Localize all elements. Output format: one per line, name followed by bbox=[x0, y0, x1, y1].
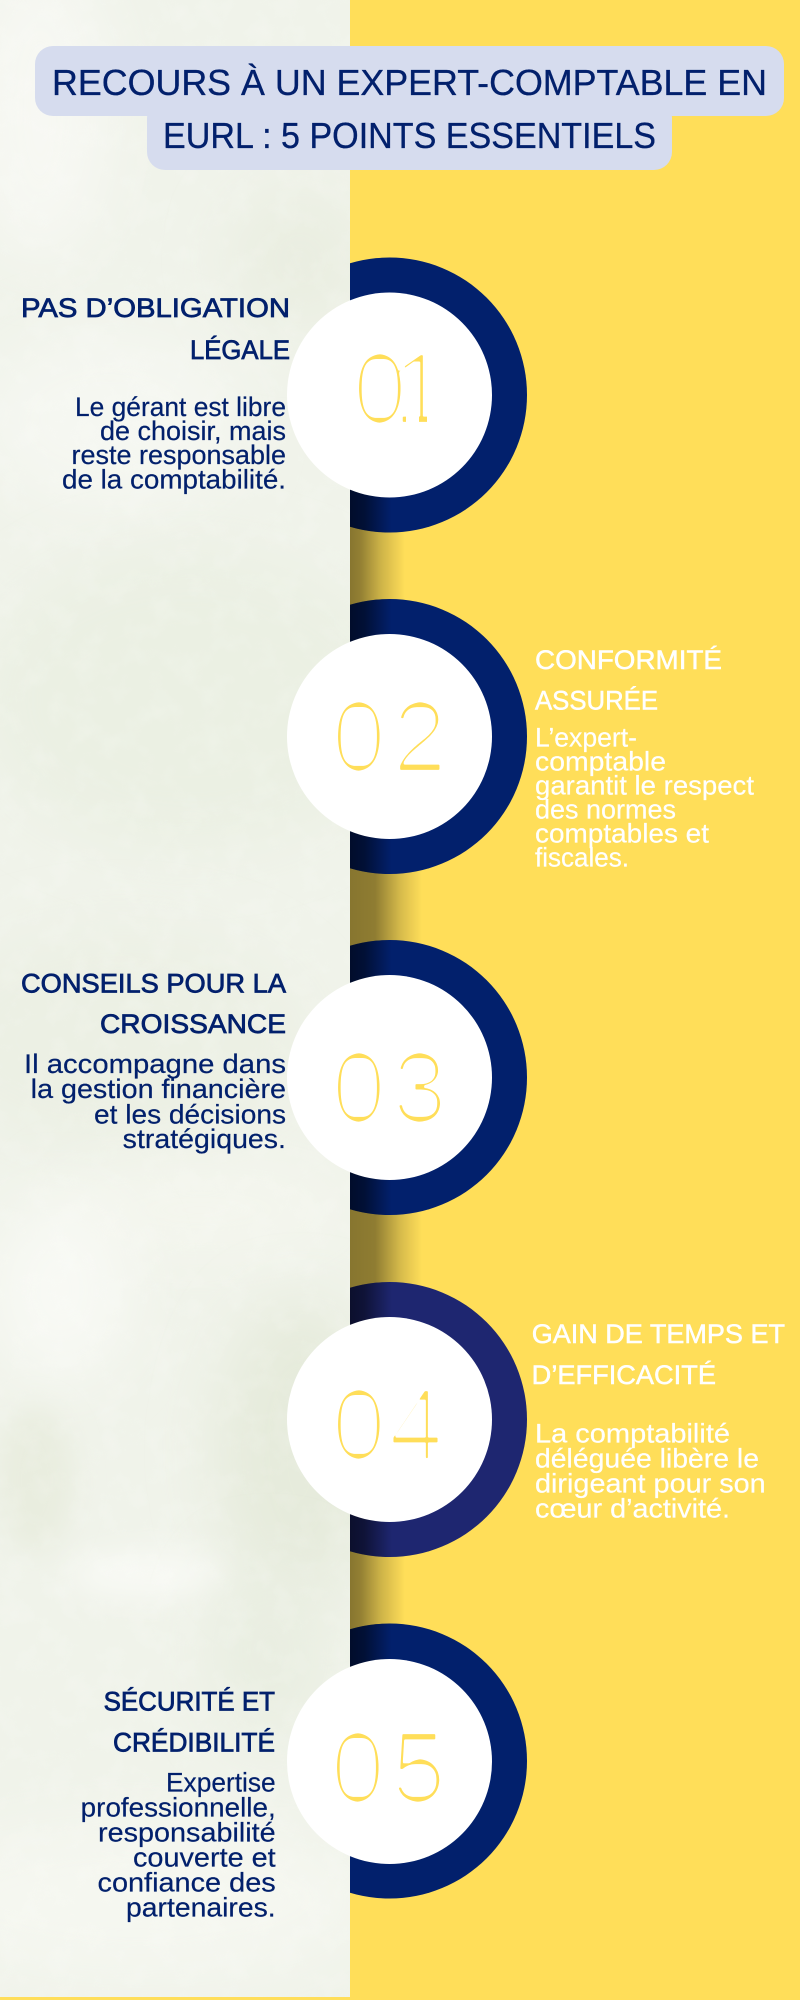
ring 4 bbox=[287, 1282, 527, 1557]
step 4 bbox=[287, 1282, 785, 1557]
title background bbox=[35, 46, 784, 170]
heading 4 bbox=[532, 1319, 785, 1390]
body 3: Il accompagne dans bbox=[24, 1049, 286, 1079]
number 01: 01 bbox=[352, 333, 448, 445]
body 5: partenaires. bbox=[126, 1893, 276, 1923]
heading 2: ASSURÉE bbox=[535, 686, 658, 716]
number 02: 02 bbox=[331, 681, 448, 793]
heading 1: PAS D’OBLIGATION bbox=[21, 293, 290, 323]
body 2: comptable bbox=[535, 747, 666, 777]
step 5 bbox=[81, 1615, 527, 1923]
body 2: des normes bbox=[535, 795, 676, 825]
body 5: confiance des bbox=[98, 1868, 276, 1898]
body 2: L’expert- bbox=[535, 723, 637, 753]
body 5: professionnelle, bbox=[81, 1793, 276, 1823]
body 2: fiscales. bbox=[535, 843, 629, 873]
heading 5: SÉCURITÉ ET bbox=[104, 1687, 275, 1717]
title text bbox=[52, 62, 767, 156]
step 2 bbox=[287, 599, 754, 874]
body 5: Expertise bbox=[166, 1768, 276, 1798]
body 5 bbox=[81, 1768, 276, 1923]
body 2 bbox=[535, 723, 755, 873]
heading 1 bbox=[21, 293, 290, 365]
number 03: 03 bbox=[331, 1032, 448, 1144]
heading 4: GAIN DE TEMPS ET bbox=[532, 1319, 785, 1349]
ring 3 bbox=[287, 940, 527, 1215]
title text: EURL : 5 POINTS ESSENTIELS bbox=[163, 115, 656, 156]
step 3 bbox=[21, 932, 527, 1223]
body 3: et les décisions bbox=[94, 1099, 286, 1129]
panel: textured left background bbox=[0, 0, 350, 1997]
body 2: comptables et bbox=[535, 819, 710, 849]
heading 3: CROISSANCE bbox=[100, 1009, 286, 1039]
body 3 bbox=[24, 1049, 286, 1154]
title text: RECOURS À UN EXPERT-COMPTABLE EN bbox=[52, 62, 767, 103]
heading 5 bbox=[104, 1687, 275, 1758]
ring 1 bbox=[287, 258, 527, 532]
heading 2: CONFORMITÉ bbox=[535, 645, 722, 675]
body 1: de la comptabilité. bbox=[62, 464, 286, 494]
body 1 bbox=[62, 392, 286, 494]
body 4: cœur d’activité. bbox=[535, 1493, 730, 1523]
body 4: La comptabilité bbox=[535, 1418, 730, 1448]
body 1: de choisir, mais bbox=[100, 416, 286, 446]
body 3: stratégiques. bbox=[123, 1124, 286, 1154]
body 1: Le gérant est libre bbox=[75, 392, 286, 422]
body 4: dirigeant pour son bbox=[535, 1468, 766, 1498]
connector shadows between circles bbox=[350, 520, 425, 1635]
number 04: 04 bbox=[331, 1369, 444, 1481]
body 1: reste responsable bbox=[72, 440, 286, 470]
body 2: garantit le respect bbox=[535, 771, 755, 801]
step 1 bbox=[21, 258, 527, 540]
body 3: la gestion financière bbox=[31, 1074, 286, 1104]
heading 2 bbox=[535, 645, 722, 716]
body 5: responsabilité bbox=[98, 1818, 276, 1848]
heading 3: CONSEILS POUR LA bbox=[21, 969, 286, 999]
heading 5: CRÉDIBILITÉ bbox=[113, 1728, 275, 1758]
ring 2 bbox=[287, 599, 527, 874]
body 4 bbox=[535, 1418, 766, 1523]
body 4: déléguée libère le bbox=[535, 1443, 759, 1473]
heading 4: D’EFFICACITÉ bbox=[532, 1360, 716, 1390]
ring 5 bbox=[287, 1624, 527, 1898]
title banner bbox=[35, 46, 784, 170]
heading 1: LÉGALE bbox=[190, 335, 290, 365]
number 05: 05 bbox=[330, 1712, 447, 1824]
body 5: couverte et bbox=[133, 1843, 276, 1873]
heading 3 bbox=[21, 969, 286, 1039]
